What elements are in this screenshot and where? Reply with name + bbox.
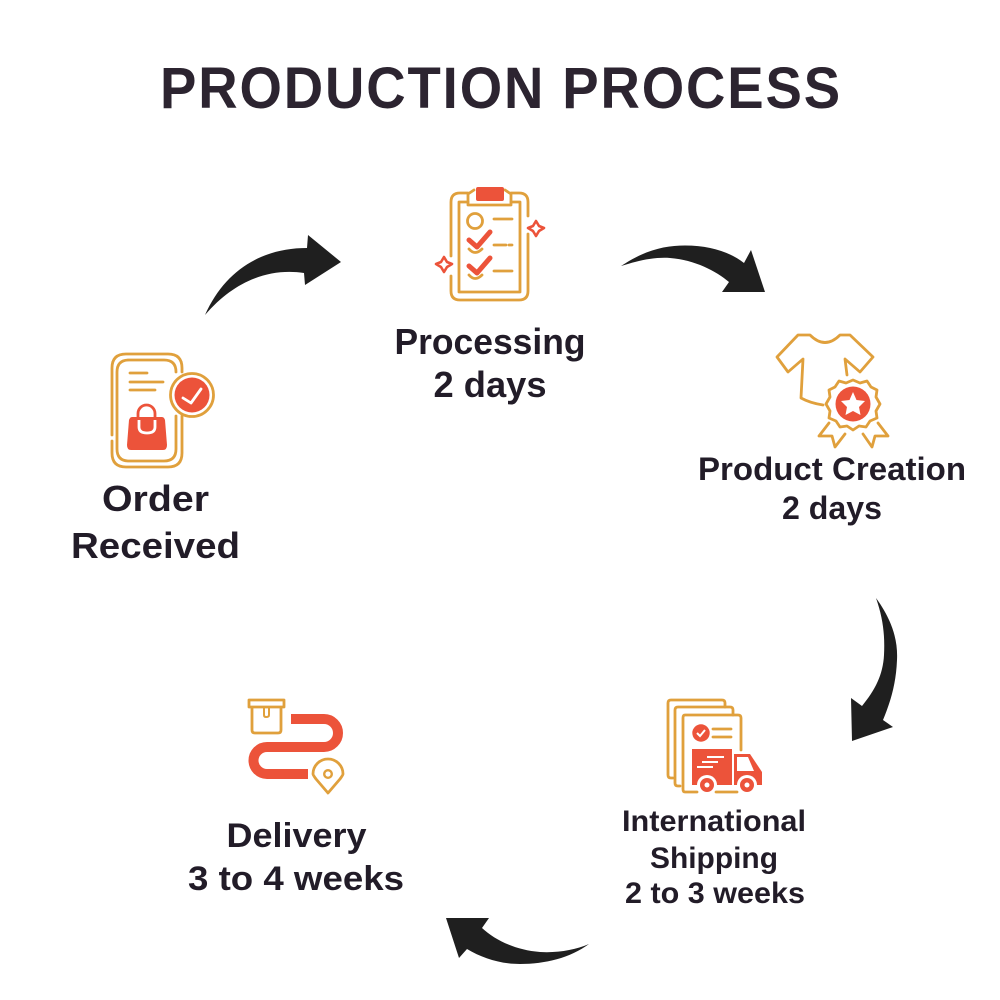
step: processing: [394, 187, 586, 405]
label: product creation: Product Creation: [698, 451, 966, 487]
step: delivery: [188, 700, 404, 898]
title: PRODUCTION PROCESS: [160, 56, 842, 121]
step: order received: [71, 354, 240, 566]
label: delivery: Delivery: [226, 817, 367, 855]
step: international shipping: [622, 700, 806, 910]
label: product creation: [698, 451, 966, 526]
label: delivery: 3 to 4 weeks: [188, 860, 404, 898]
label: delivery: [188, 817, 404, 898]
label: order received: Received: [71, 525, 240, 566]
label: product creation: 2 days: [782, 490, 882, 526]
label: order received: Order: [102, 478, 209, 519]
arrow: processing to product creation: [621, 246, 765, 292]
label: international shipping: Shipping: [650, 842, 778, 875]
icon: clipboard checklist: [436, 187, 544, 300]
label: international shipping: [622, 805, 806, 910]
label: processing: Processing: [394, 321, 586, 362]
icon: box route and location pin: [249, 700, 343, 793]
arrow: product creation to international shipping: [851, 598, 897, 741]
icon: phone with shopping bag and check badge: [112, 354, 214, 467]
label: order received: [71, 478, 240, 566]
label: international shipping: 2 to 3 weeks: [625, 877, 805, 910]
icon: shirt with award badge: [777, 335, 888, 447]
label: international shipping: International: [622, 805, 806, 838]
label: processing: 2 days: [434, 364, 546, 405]
arrow: international shipping to delivery: [446, 918, 589, 964]
arrow: order received to processing: [205, 235, 341, 315]
icon: documents and truck: [668, 700, 762, 795]
step: product creation: [698, 335, 966, 526]
label: processing: [394, 321, 586, 405]
